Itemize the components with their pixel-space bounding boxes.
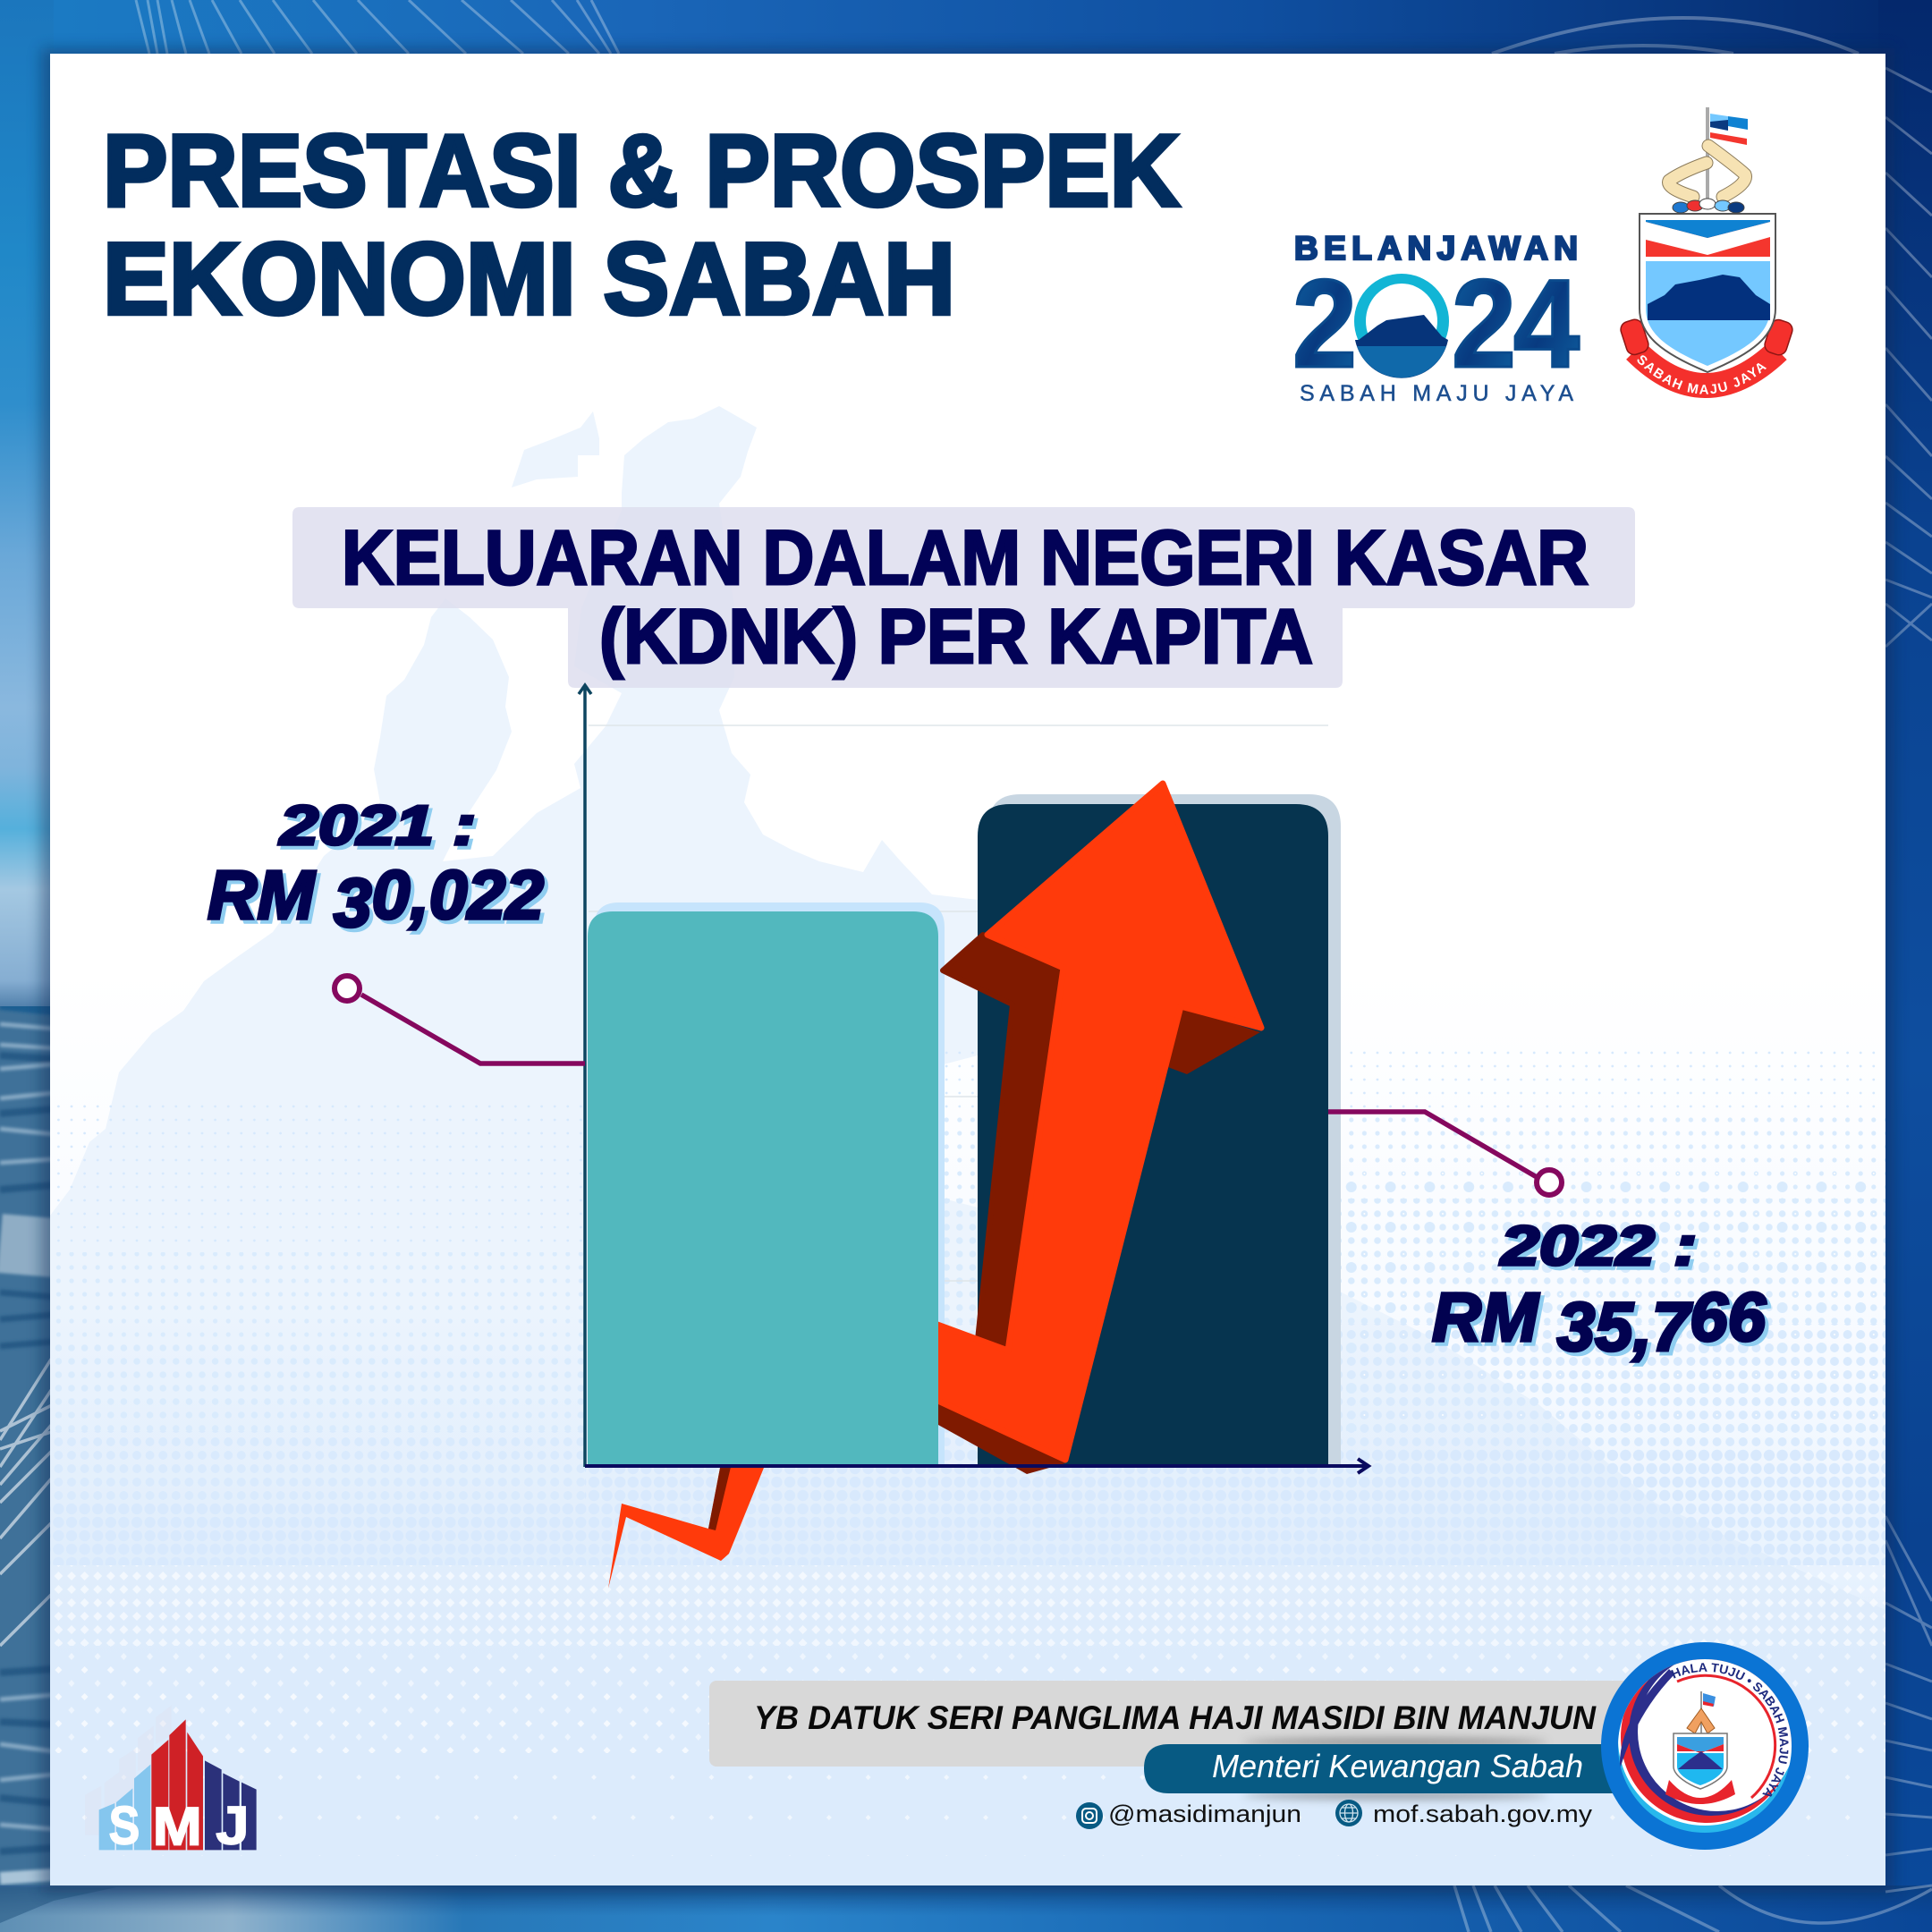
section heading: (KDNK) PER KAPITA — [599, 594, 1313, 680]
logo: Belanjawan 2024: 2 — [1452, 253, 1516, 394]
y axis arrow — [579, 685, 591, 1467]
callout: 2021: 2021 : — [283, 799, 479, 860]
name plate: YB DATUK SERI PANGLIMA HAJI MASIDI BIN MANJUN — [754, 1699, 1597, 1736]
callout: 2022 — [1328, 1112, 1770, 1369]
logo: SMJ: J — [216, 1796, 250, 1856]
callout: 2022: 35,7 — [1561, 1292, 1696, 1369]
role plate: Menteri Kewangan Sabah — [1212, 1748, 1583, 1784]
callout: 2021: 0,022 — [376, 860, 547, 937]
logo: Belanjawan 2024: 2 — [1292, 253, 1357, 394]
bar 2021 halo — [594, 902, 945, 1466]
logo: SMJ — [85, 1706, 257, 1857]
logo: Sabah coat of arms: SABAH MAJU JAYA — [1637, 355, 1767, 394]
logo: Belanjawan 2024 — [1292, 230, 1580, 406]
bar 2021 — [588, 911, 938, 1466]
callout: 2022: 35,7 — [1557, 1289, 1692, 1366]
halftone dot texture — [50, 1046, 1885, 1856]
callout: 2022: RM — [1432, 1279, 1539, 1356]
callout: 2021: 3 — [337, 869, 376, 945]
callout: 2022: 66 — [1693, 1283, 1770, 1360]
logo: SMJ: M — [153, 1797, 202, 1857]
section heading — [292, 507, 1635, 688]
callout: 2021: 0,022 — [372, 857, 544, 934]
callout: 2022: 66 — [1690, 1279, 1767, 1356]
callout: 2022: RM — [1436, 1283, 1543, 1360]
logo: Belanjawan 2024: SABAH MAJU JAYA — [1300, 381, 1573, 406]
logo: Sabah coat of arms — [1620, 107, 1793, 398]
callout: 2022: 2022 : — [1500, 1216, 1697, 1277]
callout: 2021 — [208, 795, 585, 1063]
title: PRESTASI & PROSPEK — [103, 114, 1180, 228]
x axis arrow — [585, 1459, 1368, 1473]
logo: SMJ: S — [109, 1796, 140, 1856]
bar chart — [579, 685, 1368, 1589]
logo: Belanjawan 2024: 4 — [1513, 253, 1580, 394]
title: EKONOMI SABAH — [103, 223, 955, 336]
social: website: mof.sabah.gov.my — [1373, 1801, 1593, 1827]
role plate — [1144, 1738, 1637, 1800]
logo: Belanjawan 2024: BELANJAWAN — [1294, 230, 1578, 267]
badge: Hala Tuju Sabah Maju Jaya: HALA TUJU • SABAH MAJU JAYA — [1671, 1663, 1789, 1797]
name plate — [709, 1681, 1640, 1767]
map of Sabah watermark — [50, 406, 1885, 1885]
callout: 2021: RM — [211, 860, 318, 937]
callout: 2022: 2022 : — [1504, 1219, 1700, 1281]
section heading: KELUARAN DALAM NEGERI KASAR — [342, 515, 1589, 601]
social: instagram: @masidimanjun — [1108, 1801, 1301, 1827]
callout: 2021: 3 — [334, 865, 372, 942]
title — [103, 114, 1180, 336]
badge: Hala Tuju Sabah Maju Jaya — [1601, 1642, 1809, 1850]
callout: 2021: 2021 : — [279, 795, 476, 857]
callout: 2021: RM — [208, 857, 315, 934]
red growth arrow — [608, 784, 1261, 1589]
bar 2022 — [978, 794, 1341, 1466]
